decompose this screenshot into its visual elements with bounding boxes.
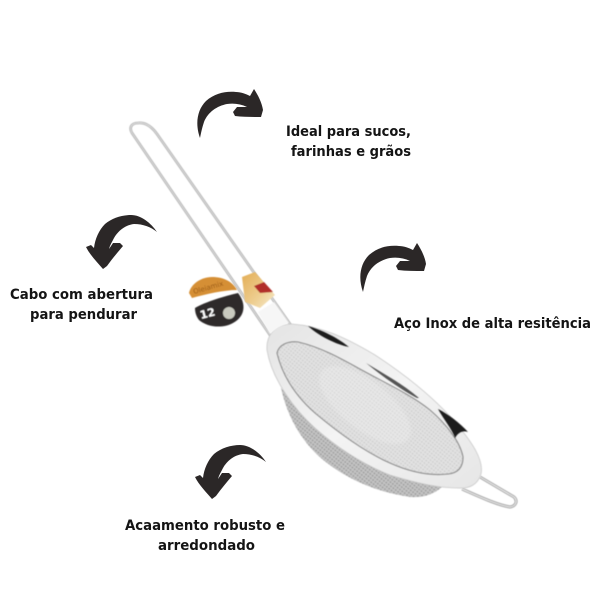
rim dark reflections xyxy=(308,326,468,438)
tag: sleeve on handle xyxy=(242,272,275,308)
arrow: left, pointing down to handle label xyxy=(86,215,157,269)
text: handle label xyxy=(10,287,153,323)
hook at far end xyxy=(462,477,516,507)
tag: dark bottom xyxy=(195,293,243,327)
tag: orange top xyxy=(189,277,237,298)
product tag: 12 xyxy=(199,306,217,322)
strainer product photo xyxy=(131,123,516,507)
text: ideal use label xyxy=(286,124,411,160)
text: finish label xyxy=(125,518,285,554)
product tag xyxy=(189,272,275,327)
text: finish label: Acaamento robusto e xyxy=(125,518,285,534)
handle wire loop xyxy=(131,123,290,335)
arrow: right, pointing to steel label xyxy=(360,243,426,292)
product tag: Oleiamix xyxy=(192,280,224,296)
arrow: bottom, pointing down to finish label xyxy=(195,445,266,499)
mesh bowl xyxy=(281,388,442,497)
mesh highlight xyxy=(307,352,423,458)
handle neck xyxy=(258,302,289,334)
outer rim xyxy=(267,324,481,488)
arrow: top, pointing to ideal use label xyxy=(197,89,263,138)
text: handle label: para pendurar xyxy=(30,307,137,323)
text: finish label: arredondado xyxy=(158,538,255,554)
inner mesh xyxy=(277,342,463,475)
text: handle label: Cabo com abertura xyxy=(10,287,153,303)
text: ideal use label: Ideal para sucos, xyxy=(286,124,411,140)
tag: round seal xyxy=(223,307,235,319)
text: ideal use label: farinhas e grãos xyxy=(291,144,411,160)
